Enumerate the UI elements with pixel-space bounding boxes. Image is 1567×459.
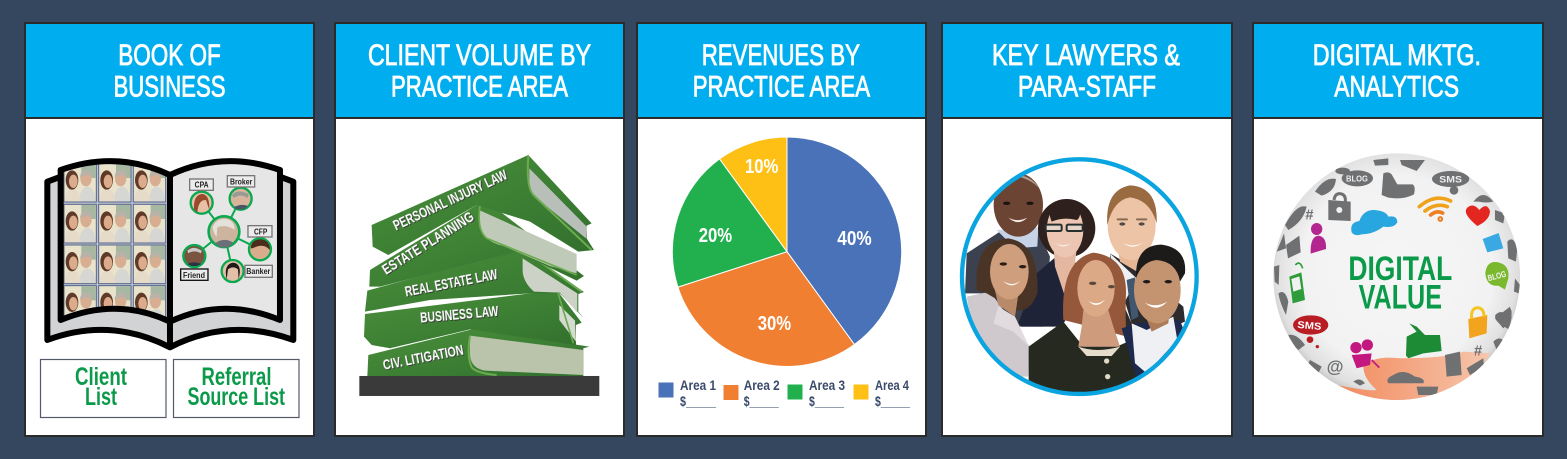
header: book of business — [25, 23, 314, 118]
icon: yellow lock — [1468, 308, 1487, 338]
illustration: team portrait in circle — [962, 159, 1197, 397]
person: man, back right — [1107, 185, 1185, 337]
digital value text: VALUE — [1359, 278, 1442, 316]
icons: gray speech bubbles: # — [1305, 208, 1313, 224]
header: book of business: BOOK OF — [118, 39, 221, 72]
book: personal injury law: PERSONAL INJURY LAW — [390, 166, 511, 234]
legend: Area 3 — [809, 377, 845, 393]
icon: red heart — [1466, 205, 1490, 226]
legend: $_____ — [875, 393, 910, 409]
book: business law: BUSINESS LAW — [420, 303, 500, 327]
icon: green phone — [1289, 263, 1305, 303]
person: man, right — [1122, 245, 1185, 380]
legend: $_____ — [744, 393, 779, 409]
icons: gray speech bubbles: @ — [1327, 356, 1344, 376]
label box: client list — [40, 360, 166, 418]
icons: gray speech bubbles: SMS — [1439, 174, 1462, 184]
person: woman, centre — [1029, 253, 1137, 397]
shelf — [359, 376, 599, 396]
legend: Area 4 — [875, 377, 909, 393]
header: digital marketing: ANALYTICS — [1334, 71, 1459, 104]
pie labels — [699, 156, 872, 335]
icon: pink movie camera — [1350, 339, 1379, 368]
pie chart — [672, 137, 902, 366]
icons: gray speech bubbles: # — [1474, 344, 1482, 360]
referral network — [181, 176, 272, 282]
referral labels: CPA — [195, 180, 209, 190]
icon: gray padlock — [1334, 194, 1345, 213]
header: key lawyers — [942, 23, 1232, 118]
referral labels: CFP — [254, 227, 268, 237]
header: digital marketing — [1253, 23, 1543, 118]
icons: gray outer ring — [1274, 158, 1520, 395]
header: client volume — [335, 23, 624, 118]
book: estate planning — [369, 205, 584, 287]
header: key lawyers: PARA-STAFF — [1018, 71, 1156, 104]
header: client volume: PRACTICE AREA — [391, 71, 568, 104]
pie labels: 30% — [758, 313, 791, 335]
label box: client list: Client — [75, 363, 127, 391]
book: civil litigation — [367, 329, 589, 376]
legend: Area 2 — [744, 377, 780, 393]
icon: open book — [47, 161, 293, 347]
pie labels: 10% — [745, 156, 779, 178]
icon: gray heart — [1495, 308, 1512, 329]
icons: gray speech bubbles: BLOG — [1346, 174, 1368, 184]
legend: $_____ — [809, 393, 844, 409]
header: key lawyers: KEY LAWYERS & — [992, 39, 1180, 72]
referral labels: Friend — [183, 270, 205, 280]
book: personal injury law — [372, 155, 594, 255]
illustration: digital value globe — [1273, 153, 1520, 408]
panel: revenues by practice area — [637, 23, 926, 436]
header: revenues: REVENUES BY — [702, 39, 860, 72]
legend: Area 1 — [680, 377, 716, 393]
book: civil litigation: CIV. LITIGATION — [382, 342, 465, 374]
panel: book of business — [25, 23, 314, 436]
icon: green blog bubble — [1485, 262, 1509, 290]
panel: client volume by practice area — [335, 23, 624, 436]
referral labels: Banker — [246, 266, 271, 276]
client photo grid — [64, 163, 166, 324]
book: real estate law — [365, 248, 584, 318]
legend: $_____ — [680, 393, 716, 409]
person: woman, left — [967, 238, 1038, 377]
label box: referral source list: Source List — [188, 383, 285, 411]
person: man, back left — [965, 173, 1050, 327]
book: estate planning: ESTATE PLANNING — [379, 208, 477, 278]
icon: blue mail — [1483, 233, 1503, 252]
icon: red sms bubble — [1293, 315, 1328, 348]
header: client volume: CLIENT VOLUME BY — [368, 39, 591, 72]
book: business law — [364, 290, 582, 348]
label box: referral source list — [174, 360, 299, 418]
pie labels: 40% — [837, 228, 872, 250]
icon: hand — [1338, 352, 1490, 400]
digital value text: DIGITAL — [1348, 250, 1452, 288]
pie labels: 20% — [699, 225, 732, 247]
icon: green blog bubble: BLOG — [1487, 269, 1507, 283]
illustration: stack of law books — [359, 155, 599, 396]
icons: gray speech bubbles — [1305, 170, 1482, 376]
book: real estate law: REAL ESTATE LAW — [404, 266, 500, 301]
person: woman with glasses — [1018, 199, 1095, 327]
icon: blue cloud — [1351, 210, 1397, 235]
panel: digital marketing analytics — [1253, 23, 1543, 436]
panel: key lawyers and para-staff — [942, 23, 1232, 436]
icon: magenta person — [1311, 223, 1326, 254]
icon: green thumb — [1406, 323, 1442, 358]
header: digital marketing: DIGITAL MKTG. — [1313, 39, 1481, 72]
icon: red sms bubble: SMS — [1297, 320, 1322, 333]
header: revenues: PRACTICE AREA — [693, 71, 870, 104]
label box: referral source list: Referral — [202, 363, 272, 391]
legend — [658, 377, 910, 409]
header: revenues — [637, 23, 926, 118]
label box: client list: List — [85, 383, 117, 411]
referral labels: Broker — [230, 176, 253, 186]
header: book of business: BUSINESS — [114, 71, 226, 104]
icon: wifi — [1419, 198, 1451, 220]
digital value text — [1348, 250, 1452, 316]
referral labels — [181, 176, 272, 280]
